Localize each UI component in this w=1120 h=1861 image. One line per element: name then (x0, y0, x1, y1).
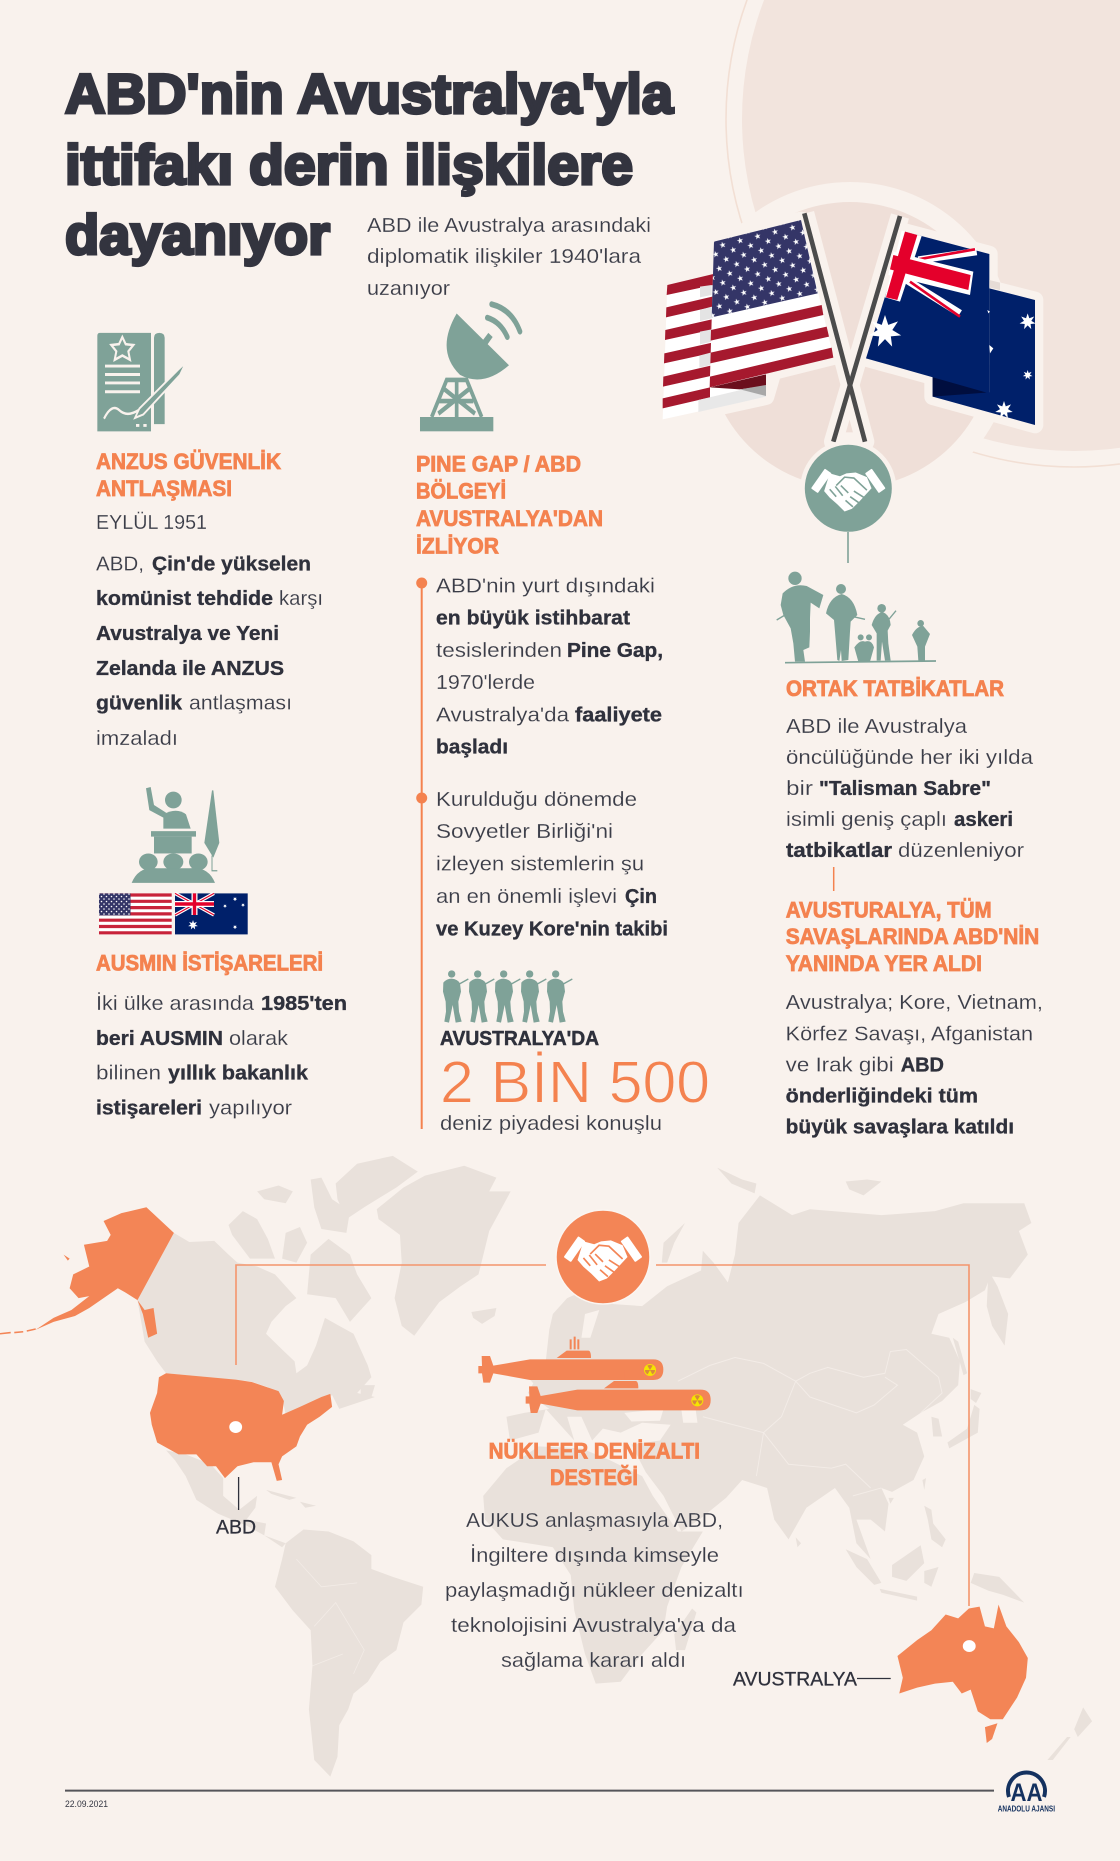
timeline (416, 578, 427, 1129)
text: AUKUS body: İngiltere dışında kimseyle (470, 1544, 719, 1567)
text: Pine Gap bullet 1: Avustralya'da (436, 704, 570, 727)
heading: Pine Gap: BÖLGEYİ (416, 479, 506, 504)
text: Pine Gap bullet 1: tesislerinden (436, 639, 562, 662)
intro text: uzanıyor (367, 277, 450, 300)
intro text (367, 214, 651, 300)
heading: Pine Gap: AVUSTRALYA'DAN (416, 506, 603, 531)
Alaska (36, 1207, 174, 1338)
text: ANZUS body: imzaladı (96, 727, 178, 750)
text: Pine Gap bullet 1: başladı (436, 736, 508, 759)
text: ANZUS body: Zelanda ile ANZUS (96, 657, 284, 680)
heading: Pine Gap (416, 452, 603, 558)
text: Pine Gap bullet 1: Pine Gap, (567, 639, 663, 662)
text: AUSMIN body (96, 992, 347, 1119)
panel: AUSMIN (96, 787, 347, 1119)
panel: ANZUS (96, 333, 323, 750)
divider tick (833, 867, 835, 891)
connector line (847, 532, 849, 563)
map: eurasia, africa, oceania (483, 1168, 1092, 1760)
text: AUSMIN body: beri AUSMIN (96, 1027, 223, 1050)
text: AUKUS body: AUKUS anlaşmasıyla ABD, (466, 1509, 723, 1532)
text: AUKUS body: sağlama kararı aldı (501, 1649, 686, 1672)
text: Pine Gap bullet 1: en büyük istihbarat (436, 606, 630, 630)
mini Australian flag (175, 893, 248, 934)
icon: submarines (478, 1337, 711, 1413)
stat: 2 bin 500 marines: AVUSTRALYA'DA (440, 1028, 599, 1050)
text: allied in wars body: büyük savaşlara katıldı (786, 1115, 1014, 1138)
heading: allied in wars: YANINDA YER ALDI (786, 951, 982, 976)
heading: joint exercises: ORTAK TATBİKATLAR (786, 676, 1004, 701)
text: AUKUS body (445, 1509, 744, 1672)
map: americas (137, 1156, 511, 1777)
text: Pine Gap bullet 1: 1970'lerde (436, 671, 535, 694)
stat: 2 bin 500 marines: 2 BİN 500 (440, 1050, 710, 1116)
submarine 1 (478, 1337, 663, 1383)
text: AUKUS body: teknolojisini Avustralya'ya da (451, 1614, 737, 1637)
footer line (65, 1790, 994, 1792)
text: AUSMIN body: İki ülke arasında (96, 992, 255, 1015)
location dot (229, 1421, 242, 1433)
text: AUSMIN body: istişareleri (96, 1096, 202, 1119)
crossed flags (663, 213, 1036, 442)
logo: Anadolu Ajansı: ANADOLU AJANSI (998, 1804, 1055, 1814)
heading: Pine Gap: PINE GAP / ABD (416, 452, 581, 476)
heading: ANZUS: ANZUS GÜVENLİK (96, 449, 281, 474)
text: Pine Gap bullet 1: ABD'nin yurt dışındaki (436, 574, 655, 598)
text: joint exercises body: ABD ile Avustralya (786, 715, 968, 738)
label: Avustralya: AVUSTRALYA (733, 1669, 857, 1691)
panel: Pine Gap (416, 304, 710, 1135)
background circles (687, 0, 1120, 508)
heading: nuclear submarine support (489, 1439, 700, 1490)
flag halos (663, 213, 1035, 442)
intro text: ABD ile Avustralya arasındaki (367, 214, 651, 237)
icon: podium speaker (132, 787, 219, 883)
text: Pine Gap bullet 2: an en önemli işlevi (436, 885, 617, 908)
flag poles (804, 213, 900, 442)
heading: allied in wars: AVUSTURALYA, TÜM (786, 897, 992, 922)
heading: ANZUS: ANTLAŞMASI (96, 476, 232, 501)
text: joint exercises body: tatbikatlar (786, 839, 892, 862)
stat: 2 bin 500 marines: deniz piyadesi konuşlu (440, 1112, 662, 1135)
text: ANZUS body: antlaşması (189, 692, 292, 714)
heading: ANZUS (96, 449, 281, 501)
panel: allied in wars (786, 897, 1043, 1138)
submarine 2 (526, 1367, 711, 1413)
map: USA highlighted (0, 1207, 332, 1481)
icon: teal handshake (800, 440, 896, 536)
US flag (663, 220, 833, 419)
label: ABD: ABD (216, 1516, 256, 1538)
text: ANZUS body: ABD, (96, 553, 144, 576)
panel: joint exercises (777, 572, 1034, 862)
text: joint exercises body: "Talisman Sabre" (819, 777, 991, 800)
text: Pine Gap bullet 2: Sovyetler Birliği'ni (436, 820, 613, 843)
text: ANZUS body: komünist tehdide (96, 587, 273, 610)
Aleutian islands (0, 1329, 36, 1334)
icon: marching soldiers (777, 572, 936, 663)
text: allied in wars body: ABD (901, 1054, 944, 1077)
icon: five soldiers (443, 970, 572, 1023)
contiguous USA (150, 1373, 332, 1481)
icon: satellite dish (420, 304, 520, 431)
Australian flag (866, 231, 1036, 425)
date: 22.09.2021 (65, 1799, 108, 1810)
title: dayanıyor (65, 203, 330, 266)
text: ANZUS body: Çin'de yükselen (152, 553, 311, 576)
text: AUSMIN body: bilinen (96, 1061, 161, 1084)
date: ANZUS: EYLÜL 1951 (96, 511, 207, 534)
text: allied in wars body: önderliğindeki tüm (786, 1085, 978, 1108)
text: joint exercises body: isimli geniş çaplı (786, 808, 947, 831)
text: AUSMIN body: yıllık bakanlık (168, 1061, 309, 1084)
text: AUSMIN body: yapılıyor (209, 1096, 292, 1119)
text: allied in wars body: Avustralya; Kore, Vietnam, (786, 991, 1043, 1014)
logo: Anadolu Ajansı (998, 1772, 1055, 1814)
intro text: diplomatik ilişkiler 1940'lara (367, 245, 642, 268)
text: joint exercises body: bir (786, 777, 813, 800)
heading: nuclear submarine support: NÜKLEER DENİZALTI (489, 1439, 700, 1464)
text: allied in wars body: ve Irak gibi (786, 1054, 894, 1077)
text: ANZUS body: güvenlik (96, 692, 183, 714)
title: ABD'nin Avustralya'yla (65, 62, 674, 125)
text: ANZUS body (96, 553, 323, 750)
map connector lines (236, 1265, 969, 1606)
text: ANZUS body: karşı (279, 587, 323, 610)
icon: orange handshake (556, 1210, 650, 1304)
heading: Pine Gap: İZLİYOR (416, 534, 499, 558)
stat: 2 bin 500 marines (440, 1028, 710, 1135)
text: Pine Gap bullet 1: faaliyete (575, 704, 662, 727)
title (65, 62, 674, 266)
heading: nuclear submarine support: DESTEĞİ (550, 1465, 638, 1490)
text: Pine Gap bullet 2: izleyen sistemlerin şu (436, 853, 644, 876)
text: AUSMIN body: 1985'ten (261, 992, 347, 1015)
text: allied in wars body: Körfez Savaşı, Afganistan (786, 1022, 1033, 1045)
text: joint exercises body: düzenleniyor (898, 839, 1024, 862)
text: Pine Gap bullet 2 (436, 788, 668, 941)
text: allied in wars body (786, 991, 1043, 1138)
text: Pine Gap bullet 2: ve Kuzey Kore'nin takibi (436, 918, 668, 941)
text: ANZUS body: Avustralya ve Yeni (96, 622, 279, 645)
text: Pine Gap bullet 2: Çin (625, 885, 657, 908)
world map (137, 1156, 1092, 1777)
text: joint exercises body (786, 715, 1034, 862)
label: ABD (216, 1477, 256, 1538)
icon: treaty document (97, 333, 186, 431)
heading: allied in wars: SAVAŞLARINDA ABD'NİN (786, 924, 1039, 949)
logo: Anadolu Ajansı: AA (1010, 1779, 1042, 1807)
text: Pine Gap bullet 1 (436, 574, 663, 759)
text: joint exercises body: askeri (954, 808, 1013, 831)
map: Australia highlighted (897, 1605, 1028, 1743)
title: ittifakı derin ilişkilere (65, 133, 633, 196)
heading: allied in wars (786, 897, 1039, 976)
text: AUSMIN body: olarak (229, 1027, 289, 1050)
heading: AUSMIN: AUSMIN İSTİŞARELERİ (96, 951, 323, 976)
text: joint exercises body: öncülüğünde her iki yılda (786, 746, 1034, 769)
mini US flag (99, 893, 172, 934)
text: AUKUS body: paylaşmadığı nükleer denizaltı (445, 1579, 744, 1602)
text: Pine Gap bullet 2: Kurulduğu dönemde (436, 788, 637, 811)
